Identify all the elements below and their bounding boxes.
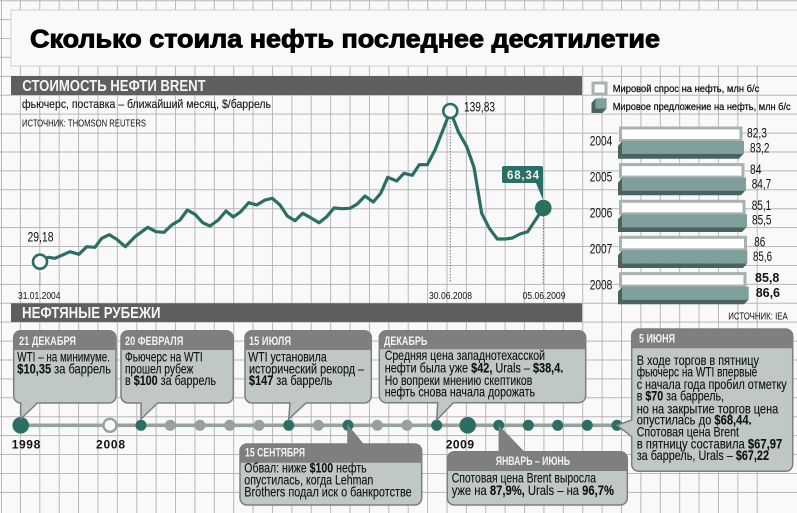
line chart: Brent price <box>18 100 566 302</box>
bar row 2008: 2008 <box>590 278 612 292</box>
label: end date: 05.06.2009 <box>522 291 566 302</box>
year label 2009: 2009 <box>446 438 474 452</box>
bar row 2008: 85,8 <box>755 271 779 285</box>
heading: Brent price: СТОИМОСТЬ НЕФТИ BRENT <box>22 78 206 95</box>
chart subtitle: фьючерс, поставка – ближайший месяц, $/баррель <box>22 97 271 111</box>
callout: 5 June: Спотовая цена Brent <box>637 425 739 440</box>
year label 2008: 2008 <box>96 437 125 451</box>
bar row 2004: 82,3 <box>747 126 767 140</box>
label: peak price: 139,83 <box>464 100 495 114</box>
marker 2008 <box>104 419 116 432</box>
callout: 15 September: опустилась, когда Lehman <box>244 472 373 487</box>
bar row 2004: 83,2 <box>750 140 770 156</box>
month dots <box>136 420 622 431</box>
timeline <box>12 417 622 452</box>
bar row 2004: 2004 <box>590 134 613 148</box>
callout: last price <box>502 166 543 200</box>
callout: January to June: уже на 87,9%, Urals – на 96,7% <box>452 483 614 498</box>
callout: December: ДЕКАБРЬ <box>384 336 427 348</box>
bar row 2006: 85,1 <box>752 198 771 213</box>
callout: 15 July <box>245 331 371 419</box>
callout: 5 June <box>617 329 793 471</box>
callout: 20 February: в $100 за баррель <box>125 373 216 388</box>
title: Сколько стоила нефть последнее десятилетие <box>30 26 660 54</box>
peak marker <box>443 104 457 118</box>
bar row 2005 <box>590 162 771 195</box>
bar row 2005: 2005 <box>590 170 612 184</box>
title panel <box>11 10 797 66</box>
chart source: ИСТОЧНИК: THOMSON REUTERS <box>22 119 146 130</box>
bar row 2007: 2007 <box>590 242 612 256</box>
callout: 5 June: в $70 за баррель, <box>637 389 724 404</box>
bar row 2006: 85,5 <box>752 212 772 228</box>
year label 1998: 1998 <box>12 437 41 451</box>
price line <box>40 111 543 262</box>
callout: 20 February <box>121 331 233 419</box>
callout: 5 June: за баррель, Urals – $67,22 <box>637 448 769 463</box>
callout: December: нефть снова начала дорожать <box>385 385 535 400</box>
legend label: demand: Мировой спрос на нефть, млн б/с <box>613 83 759 95</box>
callout: 15 September: 15 СЕНТЯБРЯ <box>245 448 305 460</box>
bar chart: demand and supply by year <box>590 126 780 304</box>
callout: 15 July: $147 за баррель <box>249 373 332 388</box>
bar row 2007: 86 <box>754 234 765 250</box>
bar row 2004 <box>590 126 770 159</box>
callout: 15 September <box>240 426 422 505</box>
callout: 15 September: Обвал: ниже $100 нефть <box>244 461 367 476</box>
callout: 21 December: $10,35 за баррель <box>17 361 111 376</box>
bar row 2007: 85,6 <box>753 249 772 264</box>
callout: 20 February: 20 ФЕВРАЛЯ <box>125 336 183 348</box>
callout: December: нефти была уже $42, Urals – $38,4. <box>385 361 563 376</box>
legend swatch: supply <box>592 98 607 113</box>
label: start date: 31.01.2004 <box>18 291 61 302</box>
bar row 2007 <box>590 234 772 268</box>
callout: 20 February: Фьючерс на WTI <box>125 350 203 365</box>
callout: 15 July: исторический рекорд – <box>249 361 364 376</box>
heading: oil milestones: НЕФТЯНЫЕ РУБЕЖИ <box>22 305 160 322</box>
callout: 21 December: WTI – на минимуме. <box>17 350 110 365</box>
bar row 2006: 2006 <box>590 206 612 220</box>
bar row 2005: 84 <box>750 162 762 177</box>
callout: 5 June: опустилась до $68,44. <box>637 412 752 427</box>
legend swatch: demand <box>593 83 606 94</box>
marker 1998 <box>12 417 29 434</box>
callout: 21 December: 21 ДЕКАБРЯ <box>19 336 76 348</box>
callout: 15 July: 15 ИЮЛЯ <box>249 336 291 348</box>
bar row 2005: 84,7 <box>752 176 771 192</box>
end marker <box>535 200 552 216</box>
callout: 5 June: фьючерс на WTI впервые <box>637 365 757 380</box>
label: peak date: 30.06.2008 <box>429 291 472 302</box>
callout: December <box>379 331 586 420</box>
callout: 15 July: WTI установила <box>248 350 327 365</box>
callout: 21 December <box>14 331 116 419</box>
bar row 2008 <box>590 271 780 304</box>
callout: 5 June: В ходе торгов в пятницу <box>637 353 759 368</box>
callout: January to June: Спотовая цена Brent выросла <box>452 471 596 486</box>
callout: December: Средняя цена западнотехасской <box>385 348 545 363</box>
callout: January to June <box>447 427 627 505</box>
legend: demand and supply <box>592 83 791 113</box>
callout: 5 June: 5 ИЮНЯ <box>639 334 675 346</box>
callout: December: Но вопреки мнению скептиков <box>385 373 532 388</box>
callout: 20 February: прошел рубеж <box>125 361 194 376</box>
callout: January to June: ЯНВАРЬ – ИЮНЬ <box>496 456 570 468</box>
label: start price: 29,18 <box>28 230 54 244</box>
heading: oil milestones <box>11 303 582 322</box>
start marker <box>33 255 47 269</box>
callout: 15 September: Brothers подал иск о банкротстве <box>244 485 412 500</box>
bar row 2008: 86,6 <box>756 286 780 300</box>
callout: 5 June: в пятницу составила $67,97 <box>637 436 782 451</box>
bar row 2006 <box>590 198 772 232</box>
marker 2009 <box>459 417 476 434</box>
heading: Brent price <box>11 76 582 95</box>
callout: last price: 68,34 <box>507 170 540 182</box>
